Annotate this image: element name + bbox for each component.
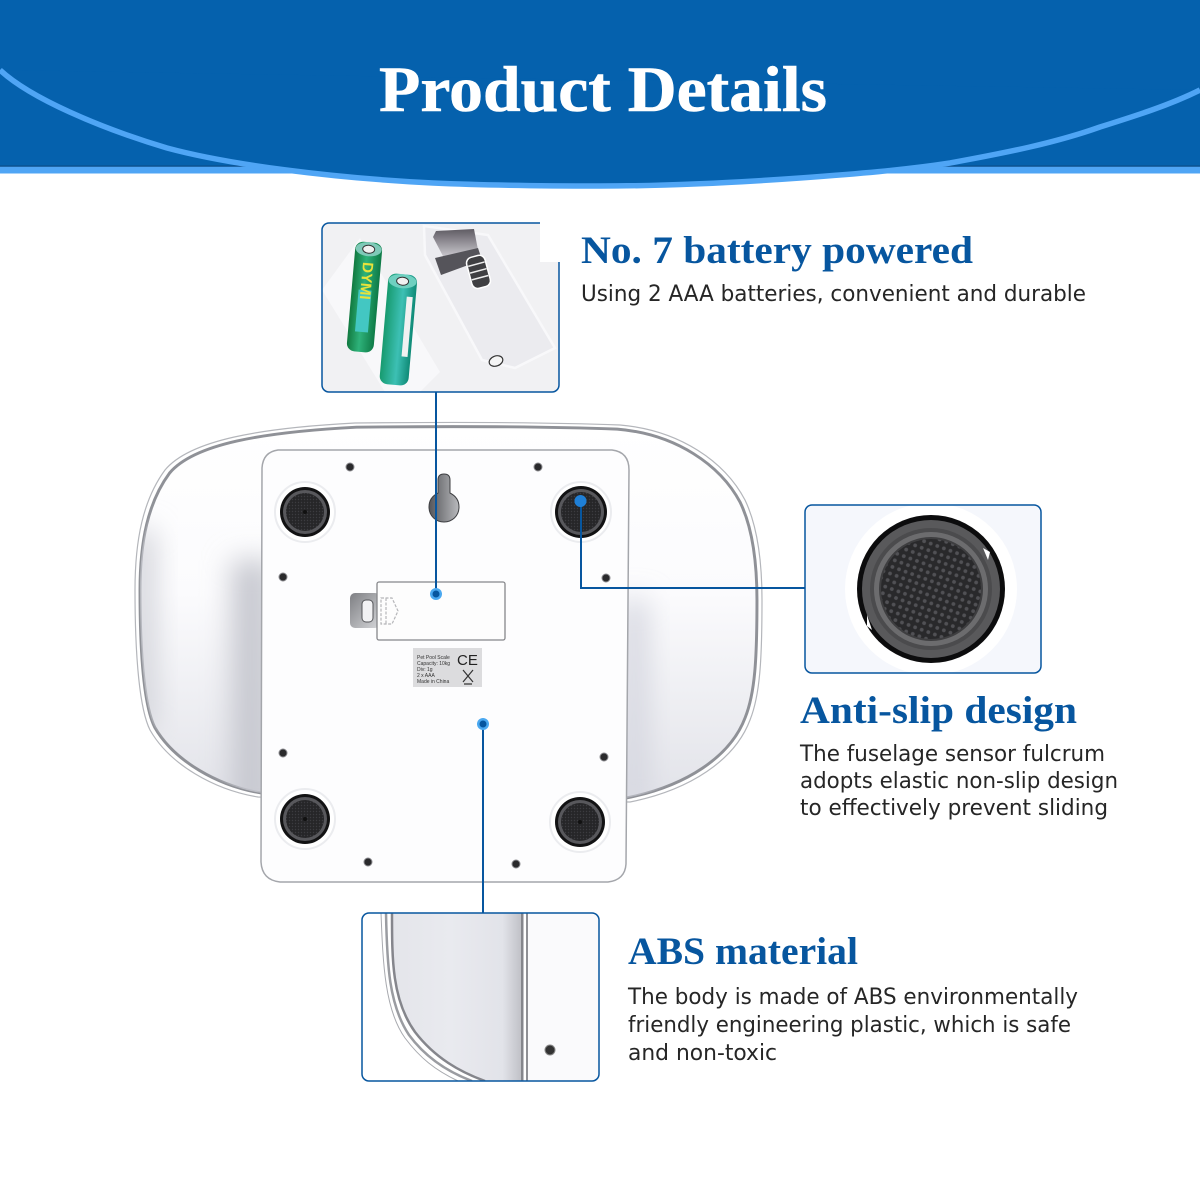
screws [279, 463, 610, 868]
product label: Div: 1g [417, 667, 433, 673]
product label: CE [457, 652, 478, 669]
callout: battery photo [322, 221, 561, 392]
battery door [424, 226, 555, 368]
text: battery: Using 2 AAA batteries, convenient and durable [581, 282, 1086, 307]
connector: ABS [477, 718, 489, 913]
text: ABS: and non-toxic [628, 1041, 777, 1066]
metal contact [433, 229, 478, 258]
spring [465, 254, 492, 290]
connector: anti-slip [574, 495, 805, 588]
battery cover [350, 582, 505, 640]
header banner [0, 0, 1200, 186]
battery tray [322, 238, 440, 392]
callout: anti-slip photo [805, 503, 1041, 675]
heading: battery: No. 7 battery powered [581, 229, 973, 272]
product label: Pet Pool Scale [417, 655, 450, 661]
battery right [379, 273, 418, 386]
callout: ABS material photo [362, 913, 599, 1081]
scale base plate [261, 450, 629, 882]
product label: 2 x AAA [417, 673, 435, 679]
text: ABS: friendly engineering plastic, which is safe [628, 1013, 1071, 1038]
text: anti-slip [799, 742, 1118, 821]
keyhole [429, 474, 459, 522]
scale shell [130, 422, 762, 820]
rubber feet [275, 482, 611, 852]
product label [413, 648, 482, 687]
text: anti-slip: to effectively prevent sliding [800, 796, 1108, 821]
battery left: DYMI [356, 261, 376, 300]
heading: ABS: ABS material [628, 930, 858, 973]
product label: Made in China [417, 679, 449, 685]
product label: Capacity: 10kg [417, 661, 450, 667]
connector: battery [430, 392, 442, 600]
text: anti-slip: The fuselage sensor fulcrum [799, 742, 1105, 767]
text: ABS: The body is made of ABS environmentally [627, 985, 1078, 1010]
scale illustration [130, 422, 762, 882]
text: anti-slip: adopts elastic non-slip design [800, 769, 1118, 794]
heading: anti-slip: Anti-slip design [800, 689, 1077, 732]
text: ABS [627, 985, 1078, 1066]
title: Product Details [379, 54, 827, 126]
battery left [346, 241, 383, 353]
